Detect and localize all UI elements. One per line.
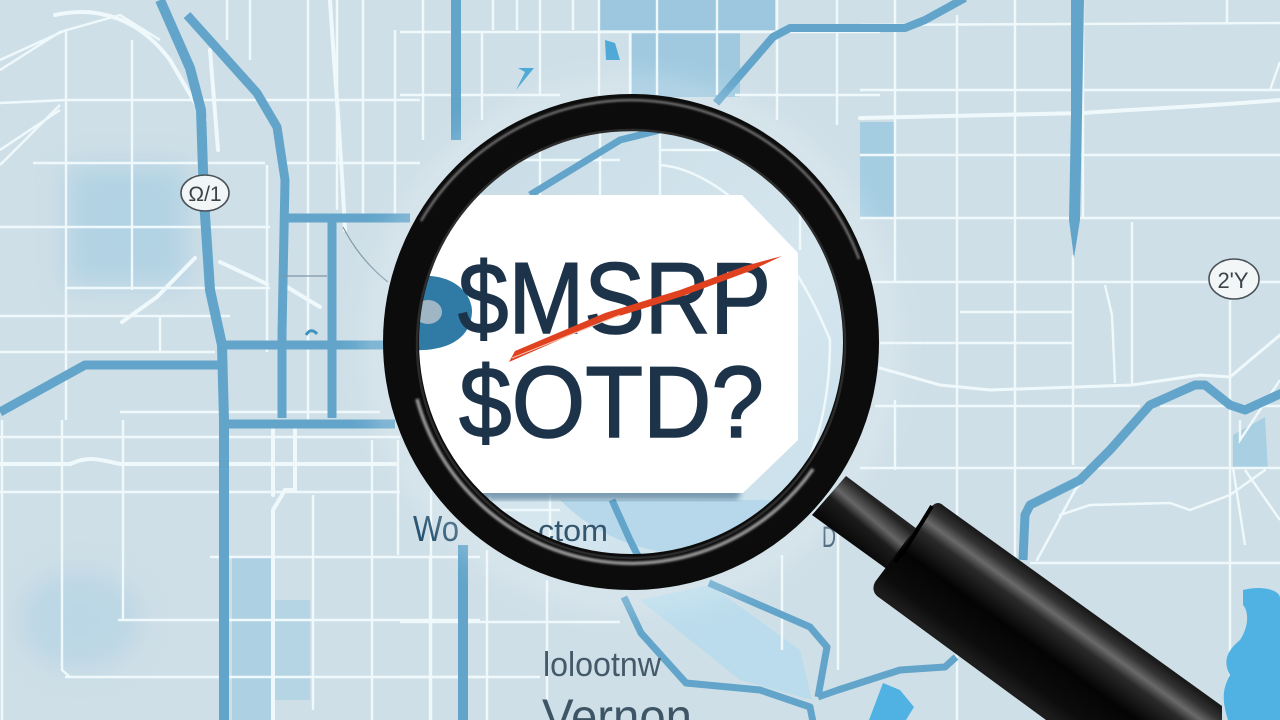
lens halo shadow — [377, 89, 887, 599]
map label: district: lolootnw — [543, 646, 661, 684]
red strikethrough — [509, 256, 782, 362]
road: south loops — [624, 597, 813, 720]
badge: west route marker: Ω/1 — [188, 183, 222, 206]
price tag shadow — [482, 492, 744, 502]
road: east river — [1023, 385, 1280, 560]
price tag — [410, 195, 798, 493]
road: cross links — [0, 218, 410, 424]
magnifier handle — [812, 476, 1222, 720]
road: tapered north vertical — [1069, 0, 1084, 258]
price text: OTD: $OTD? — [459, 347, 764, 459]
map label: Wo: Wo — [413, 508, 459, 549]
ring highlight: top — [421, 100, 859, 259]
ring highlight: bottom — [417, 399, 813, 563]
badge: west route marker — [181, 175, 229, 211]
map label: partial D: D — [822, 521, 836, 554]
badge: east route marker — [1209, 259, 1259, 299]
handle grip — [873, 503, 1222, 720]
small pond arc — [306, 331, 317, 335]
handle neck — [812, 476, 925, 575]
blue blob behind the text — [419, 276, 472, 350]
thicker streets — [55, 0, 345, 230]
lens map detail — [480, 134, 832, 538]
road: west highway — [160, 0, 224, 720]
magnifier ring — [401, 100, 861, 572]
price text: MSRP: $MSRP — [458, 243, 771, 355]
badge: east route marker: 2'Y — [1217, 268, 1249, 293]
water: south lake — [869, 683, 914, 720]
magnifier lens view — [419, 132, 832, 554]
thin grey survey line — [281, 227, 388, 282]
water: south east bay — [1224, 588, 1280, 720]
map label: ctom: ctom — [538, 513, 608, 548]
road: north east — [716, 0, 965, 103]
small ponds — [516, 40, 620, 90]
road: central verticals — [456, 0, 463, 720]
road: inner highway — [187, 15, 285, 418]
